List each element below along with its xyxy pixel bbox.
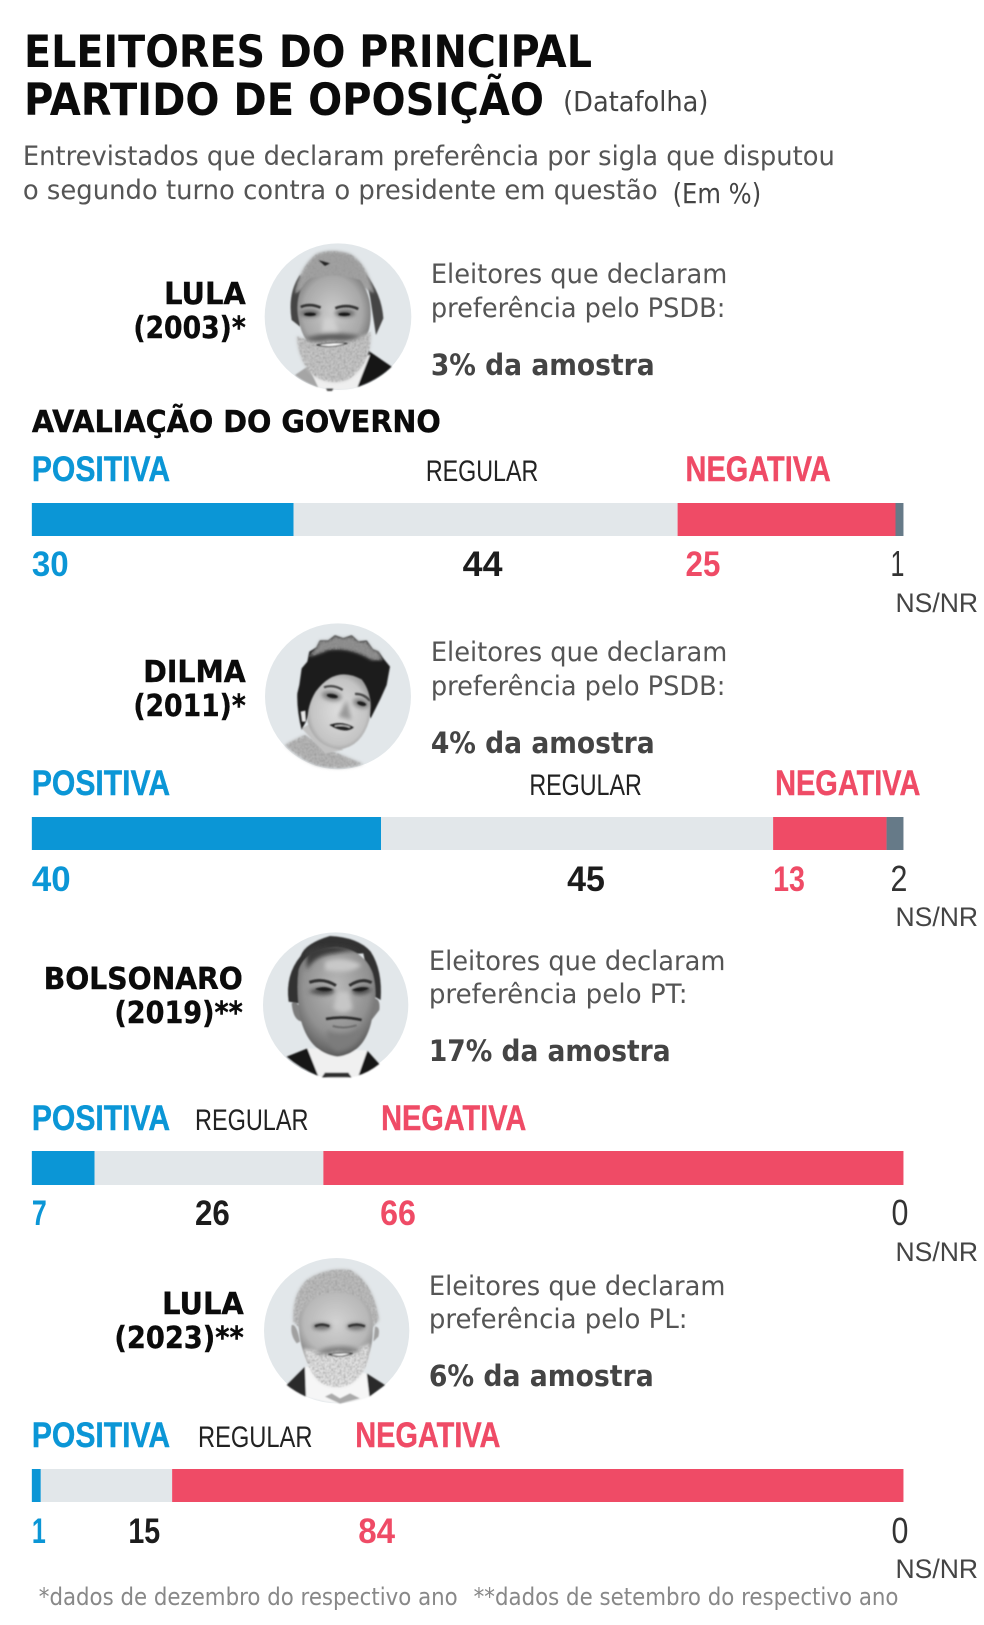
- text: preference Lula 2023: Eleitores que declaram: [429, 1271, 725, 1302]
- text: preference Bolsonaro 2019: 17% da amostra: [429, 1034, 671, 1068]
- bar chart: Lula 2003: 1: [891, 543, 904, 584]
- name: Lula 2023: LULA: [162, 1287, 244, 1322]
- bar chart: Bolsonaro 2019: 7: [32, 1194, 47, 1233]
- bar chart: Lula 2003: 25: [686, 545, 720, 584]
- bar chart: Dilma 2011: 40: [32, 860, 71, 899]
- footnote: **dados de setembro do respectivo ano: [474, 1583, 898, 1611]
- name: Dilma 2011: [133, 655, 246, 724]
- text: preference Lula 2023: [429, 1271, 725, 1393]
- text: preference Dilma 2011: Eleitores que declaram: [431, 637, 727, 668]
- portrait: Bolsonaro 2019: [263, 932, 408, 1078]
- bar chart: Lula 2023: 15: [128, 1512, 160, 1551]
- heading: avaliação do governo: AVALIAÇÃO DO GOVERNO: [32, 403, 441, 440]
- text: preference Bolsonaro 2019: [429, 946, 725, 1068]
- bar chart: Lula 2023: NEGATIVA: [355, 1416, 500, 1455]
- text: preference Lula 2023: 6% da amostra: [429, 1359, 654, 1393]
- name: Bolsonaro 2019: BOLSONARO: [44, 962, 243, 997]
- bar chart: Lula 2023: 84: [358, 1512, 396, 1551]
- bar chart: Dilma 2011: POSITIVA: [32, 764, 170, 803]
- text: preference Dilma 2011: 4% da amostra: [431, 726, 655, 760]
- subtitle: [23, 141, 835, 210]
- panel: Lula 2003: [32, 243, 978, 618]
- portrait: Lula 2003: [265, 243, 411, 391]
- bar chart: Lula 2023: NS/NR: [896, 1554, 978, 1584]
- subtitle: o segundo turno contra o presidente em questão: [23, 175, 658, 206]
- bar chart: Lula 2003: NEGATIVA: [686, 450, 831, 489]
- name: Lula 2023: [114, 1287, 244, 1356]
- text: preference Lula 2003: Eleitores que declaram: [431, 259, 727, 290]
- bar chart: Dilma 2011: [32, 764, 978, 932]
- text: preference Dilma 2011: [431, 637, 727, 760]
- bar chart: Lula 2003: POSITIVA: [32, 450, 170, 489]
- panel: Bolsonaro 2019: [32, 932, 978, 1267]
- text: preference Lula 2003: [431, 259, 727, 382]
- bar chart: Bolsonaro 2019: POSITIVA: [32, 1099, 170, 1138]
- name: Bolsonaro 2019: (2019)**: [114, 996, 243, 1031]
- source note: (Datafolha): [563, 85, 708, 118]
- bar chart: Bolsonaro 2019: 0: [892, 1192, 908, 1233]
- name: Lula 2003: LULA: [164, 277, 246, 312]
- bar chart: Bolsonaro 2019: [32, 1099, 978, 1267]
- bar chart: Bolsonaro 2019: 26: [195, 1194, 230, 1233]
- name: Bolsonaro 2019: [44, 962, 243, 1031]
- title: PARTIDO DE OPOSIÇÃO: [24, 73, 544, 126]
- title: ELEITORES DO PRINCIPAL: [24, 27, 592, 78]
- bar chart: Lula 2023: 0: [892, 1510, 908, 1551]
- name: Dilma 2011: DILMA: [143, 655, 246, 690]
- bar chart: Dilma 2011: 13: [773, 860, 805, 899]
- bar chart: Bolsonaro 2019: REGULAR: [195, 1104, 308, 1137]
- name: Lula 2003: [133, 277, 246, 346]
- panel: Lula 2023: [32, 1258, 978, 1584]
- panel: Dilma 2011: [32, 623, 978, 932]
- subtitle: Entrevistados que declaram preferência por sigla que disputou: [23, 141, 835, 172]
- portrait: Lula 2023: [264, 1258, 409, 1404]
- bar chart: Lula 2023: [32, 1416, 978, 1584]
- bar chart: Dilma 2011: 2: [891, 858, 907, 899]
- bar chart: Bolsonaro 2019: NEGATIVA: [381, 1099, 526, 1138]
- bar chart: Dilma 2011: NS/NR: [896, 902, 978, 932]
- bar chart: Lula 2023: 1: [32, 1512, 46, 1551]
- text: preference Bolsonaro 2019: preferência pelo PT:: [429, 979, 688, 1010]
- footnote: [39, 1583, 898, 1611]
- bar chart: Lula 2023: REGULAR: [198, 1421, 312, 1454]
- bar chart: Lula 2023: POSITIVA: [32, 1416, 170, 1455]
- text: preference Lula 2003: preferência pelo PSDB:: [431, 293, 725, 324]
- subtitle: (Em %): [673, 177, 761, 210]
- name: Lula 2003: (2003)*: [133, 311, 246, 346]
- name: Lula 2023: (2023)**: [114, 1321, 244, 1356]
- bar chart: Dilma 2011: NEGATIVA: [775, 764, 920, 803]
- bar chart: Bolsonaro 2019: NS/NR: [896, 1237, 978, 1267]
- bar chart: Lula 2003: [32, 450, 978, 618]
- text: preference Bolsonaro 2019: Eleitores que declaram: [429, 946, 725, 977]
- bar chart: Lula 2003: REGULAR: [426, 455, 538, 488]
- text: preference Dilma 2011: preferência pelo PSDB:: [431, 671, 725, 702]
- text: preference Lula 2003: 3% da amostra: [431, 348, 655, 382]
- bar chart: Lula 2003: 30: [32, 545, 69, 584]
- bar chart: Dilma 2011: 45: [567, 860, 605, 899]
- bar chart: Lula 2003: 44: [463, 545, 503, 584]
- text: preference Lula 2023: preferência pelo PL:: [429, 1304, 688, 1335]
- footnote: *dados de dezembro do respectivo ano: [39, 1583, 458, 1611]
- title: [24, 27, 592, 126]
- bar chart: Dilma 2011: REGULAR: [529, 769, 642, 802]
- portrait: Dilma 2011: [265, 623, 411, 769]
- bar chart: Bolsonaro 2019: 66: [380, 1194, 416, 1233]
- name: Dilma 2011: (2011)*: [133, 689, 246, 724]
- bar chart: Lula 2003: NS/NR: [896, 588, 978, 618]
